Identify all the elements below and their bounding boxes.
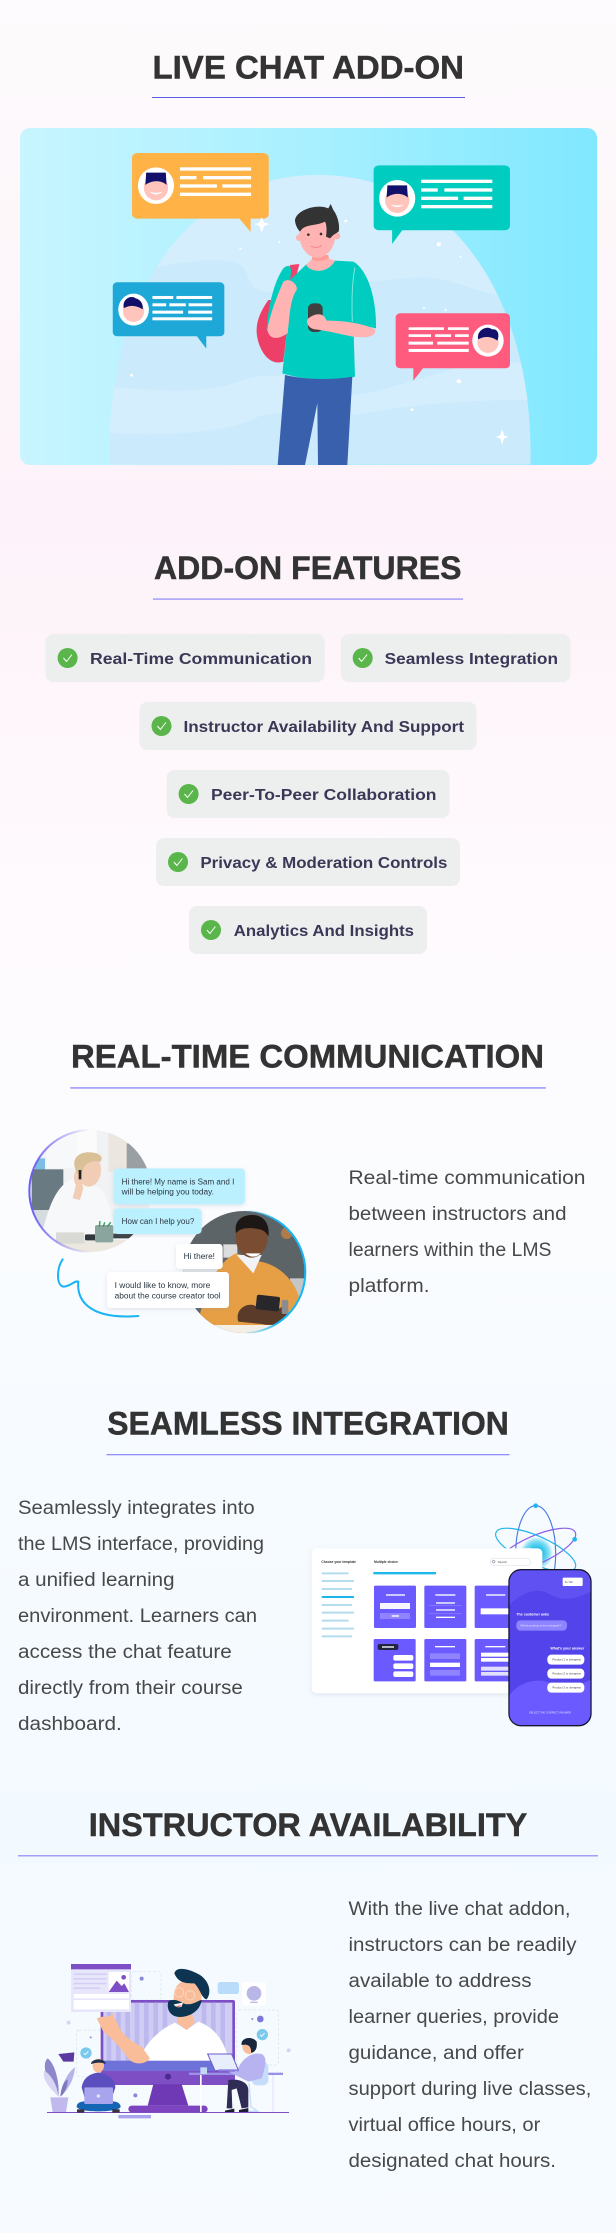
- template chooser card: Search: [498, 1560, 507, 1564]
- pill: analytics and insights: Analytics And Insights: [234, 923, 414, 940]
- text block: seamless integration: access the chat feature: [18, 1642, 232, 1663]
- phone mockup: 6 / 20: [565, 1580, 573, 1584]
- pill: privacy and moderation controls: [156, 838, 460, 886]
- text block: instructor availability: designated chat hours.: [348, 2151, 556, 2172]
- pill: seamless integration: [341, 634, 570, 682]
- learner at desk: [208, 2038, 268, 2112]
- photo: agent with headset: [27, 1128, 153, 1255]
- status badges: [67, 1977, 291, 2097]
- atom graphic: [490, 1503, 581, 1601]
- instructor figure: [97, 1969, 229, 2063]
- text block: real-time communication: Real-time communication: [348, 1168, 586, 1189]
- pill: instructor availability and support: Instructor Availability And Support: [184, 719, 464, 736]
- chat bubble: blue: [113, 282, 224, 349]
- pill: seamless integration: Seamless Integration: [385, 651, 558, 668]
- heading: add-on features: ADD-ON FEATURES: [154, 550, 462, 586]
- pill: instructor availability and support: [140, 702, 476, 750]
- text block: instructor availability: available to address: [348, 1971, 532, 1992]
- desk: [189, 2067, 283, 2112]
- text block: seamless integration: a unified learning: [18, 1570, 174, 1591]
- message: how can I help: How can I help you?: [122, 1217, 195, 1226]
- text block: seamless integration: the LMS interface, providing: [18, 1534, 264, 1555]
- message: learner hello: [176, 1244, 223, 1269]
- phone mockup: The customer asks: [516, 1613, 549, 1617]
- pill: privacy and moderation controls: Privacy & Moderation Controls: [200, 855, 447, 872]
- phone mockup: Product 2 is cheapest: [552, 1672, 581, 1676]
- phone mockup: [509, 1570, 591, 1726]
- heading: live chat add-on: LIVE CHAT ADD-ON: [152, 49, 464, 85]
- text block: instructor availability: With the live chat addon,: [348, 1899, 570, 1920]
- chat bubble: pink: [396, 313, 510, 381]
- monitor: [101, 2000, 235, 2112]
- message: agent greeting: Hi there! My name is Sam and I: [122, 1177, 234, 1186]
- text block: real-time communication: between instructors and: [348, 1204, 566, 1225]
- illustration: chat between agent and learner: [27, 1128, 310, 1338]
- heading: seamless integration: SEAMLESS INTEGRATION: [107, 1406, 509, 1442]
- ground line: [47, 2112, 289, 2113]
- globe backdrop: [106, 167, 534, 465]
- message: agent greeting: [114, 1168, 245, 1204]
- learner with laptop: [77, 2059, 121, 2113]
- illustration: course builder with phone: [312, 1503, 591, 1726]
- phone mockup: What's your answer: [550, 1647, 585, 1651]
- text block: instructor availability: instructors can be readily: [348, 1935, 577, 1956]
- pill: analytics and insights: [189, 906, 427, 954]
- message: learner question: I would like to know, more: [115, 1281, 211, 1290]
- feature pills: [46, 634, 571, 954]
- phone mockup: SELECT THE CORRECT ANSWER: [529, 1711, 571, 1715]
- message: agent greeting: will be helping you today.: [121, 1188, 214, 1197]
- text block: instructor availability: guidance, and offer: [348, 2043, 525, 2064]
- text block: real-time communication: [348, 1168, 586, 1297]
- text block: instructor availability: virtual office hours, or: [348, 2115, 541, 2136]
- text block: real-time communication: platform.: [348, 1276, 430, 1297]
- phone mockup: Which product is the cheapest?: [520, 1624, 562, 1628]
- message: how can I help: [114, 1208, 202, 1234]
- text block: instructor availability: support during live classes,: [348, 2079, 591, 2100]
- message: learner question: [107, 1272, 229, 1308]
- content window card: [71, 1964, 131, 2012]
- sparkles: [130, 217, 508, 445]
- heading: real-time communication: REAL-TIME COMMUNICATION: [71, 1039, 544, 1075]
- text block: real-time communication: learners within the LMS: [348, 1240, 552, 1261]
- chat bubble and globe: [218, 1982, 266, 2006]
- template chooser card: Choose your template: [321, 1560, 356, 1564]
- scribble tail: [58, 1259, 138, 1316]
- pill: real-time communication: Real-Time Communication: [90, 651, 312, 668]
- dashed frames: [77, 1972, 278, 2077]
- plant: [44, 2052, 75, 2112]
- text block: seamless integration: [18, 1498, 264, 1735]
- text block: seamless integration: dashboard.: [18, 1714, 122, 1735]
- message: learner question: about the course creator tool: [115, 1291, 221, 1300]
- chat bubble: teal: [374, 165, 510, 244]
- text block: seamless integration: directly from their course: [18, 1678, 243, 1699]
- pill: peer-to-peer collaboration: Peer-To-Peer Collaboration: [211, 787, 436, 804]
- chat bubble: orange: [132, 153, 269, 232]
- character: student with phone: [257, 204, 376, 465]
- panel: hero illustration: [20, 128, 597, 465]
- text block: instructor availability: [348, 1899, 591, 2172]
- text block: seamless integration: environment. Learners can: [18, 1606, 257, 1627]
- template chooser card: [312, 1548, 542, 1693]
- photo: learner with smartphone: [180, 1208, 310, 1338]
- text block: seamless integration: Seamlessly integrates into: [18, 1498, 255, 1519]
- message: learner hello: Hi there!: [184, 1252, 215, 1261]
- pill: real-time communication: [46, 634, 325, 682]
- template chooser card: Multiple choice: [374, 1560, 398, 1564]
- phone mockup: Product 1 is cheapest: [552, 1658, 581, 1662]
- pill: peer-to-peer collaboration: [167, 770, 450, 818]
- illustration: instructor on video screen: [44, 1964, 291, 2118]
- text block: instructor availability: learner queries, provide: [348, 2007, 559, 2028]
- heading: instructor availability: INSTRUCTOR AVAILABILITY: [89, 1807, 527, 1843]
- phone mockup: Product 3 is cheapest: [552, 1686, 581, 1690]
- open book: [118, 2115, 151, 2118]
